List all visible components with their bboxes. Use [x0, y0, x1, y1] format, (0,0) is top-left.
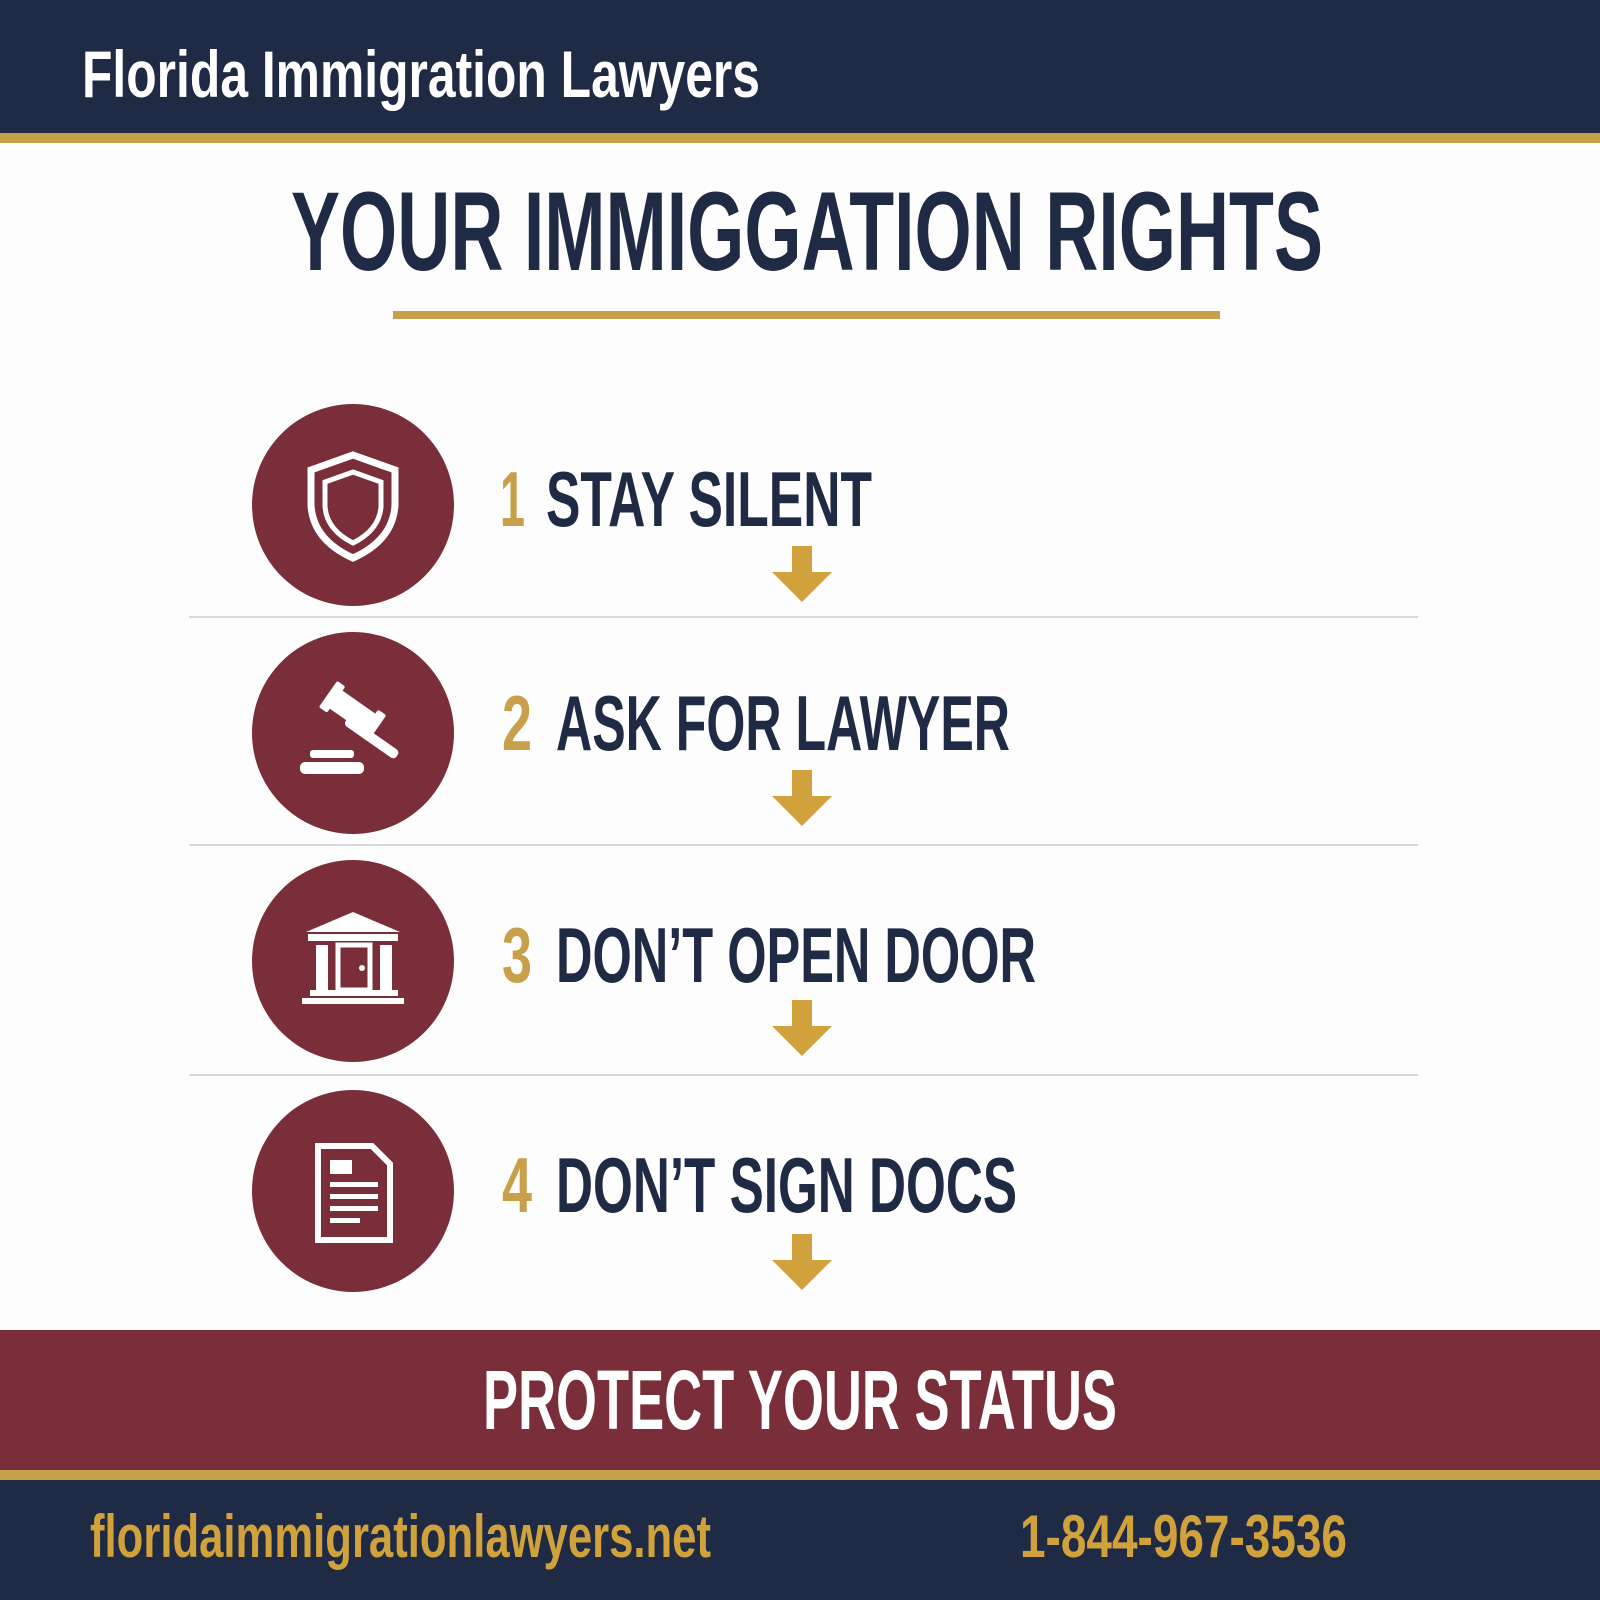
header text: Florida Immigration Lawyers [82, 37, 760, 111]
step 2: ask for lawyer [252, 632, 1010, 834]
arrow [772, 1234, 832, 1290]
step text: 2 [502, 679, 532, 767]
dividers [189, 616, 1418, 1076]
footer phone: 1-844-967-3536 [1020, 1503, 1347, 1570]
icon: building door [252, 860, 454, 1062]
step text: 3 [502, 911, 532, 999]
header bar [0, 0, 1600, 143]
title underline [393, 311, 1220, 319]
icon: document [252, 1090, 454, 1292]
arrow [772, 770, 832, 826]
footer [0, 1470, 1600, 1600]
step text: 1 [500, 455, 525, 543]
banner: protect your status: PROTECT YOUR STATUS [483, 1353, 1117, 1447]
step 1: stay silent [252, 404, 872, 606]
step 4: don't sign docs [252, 1090, 1017, 1292]
step 1: stay silent: STAY SILENT [546, 455, 872, 543]
step text: 4 [502, 1141, 532, 1229]
step 4: don't sign docs: DON’T SIGN DOCS [556, 1141, 1017, 1229]
step 3: don't open door [252, 860, 1036, 1062]
arrow [772, 1000, 832, 1056]
arrow [772, 546, 832, 602]
banner: protect your status [0, 1330, 1600, 1471]
step 2: ask for lawyer: ASK FOR LAWYER [556, 679, 1010, 767]
icon: gavel [252, 632, 454, 834]
footer url: floridaimmigrationlawyers.net [90, 1503, 711, 1570]
icon: shield [252, 404, 454, 606]
step 3: don't open door: DON’T OPEN DOOR [556, 911, 1036, 999]
